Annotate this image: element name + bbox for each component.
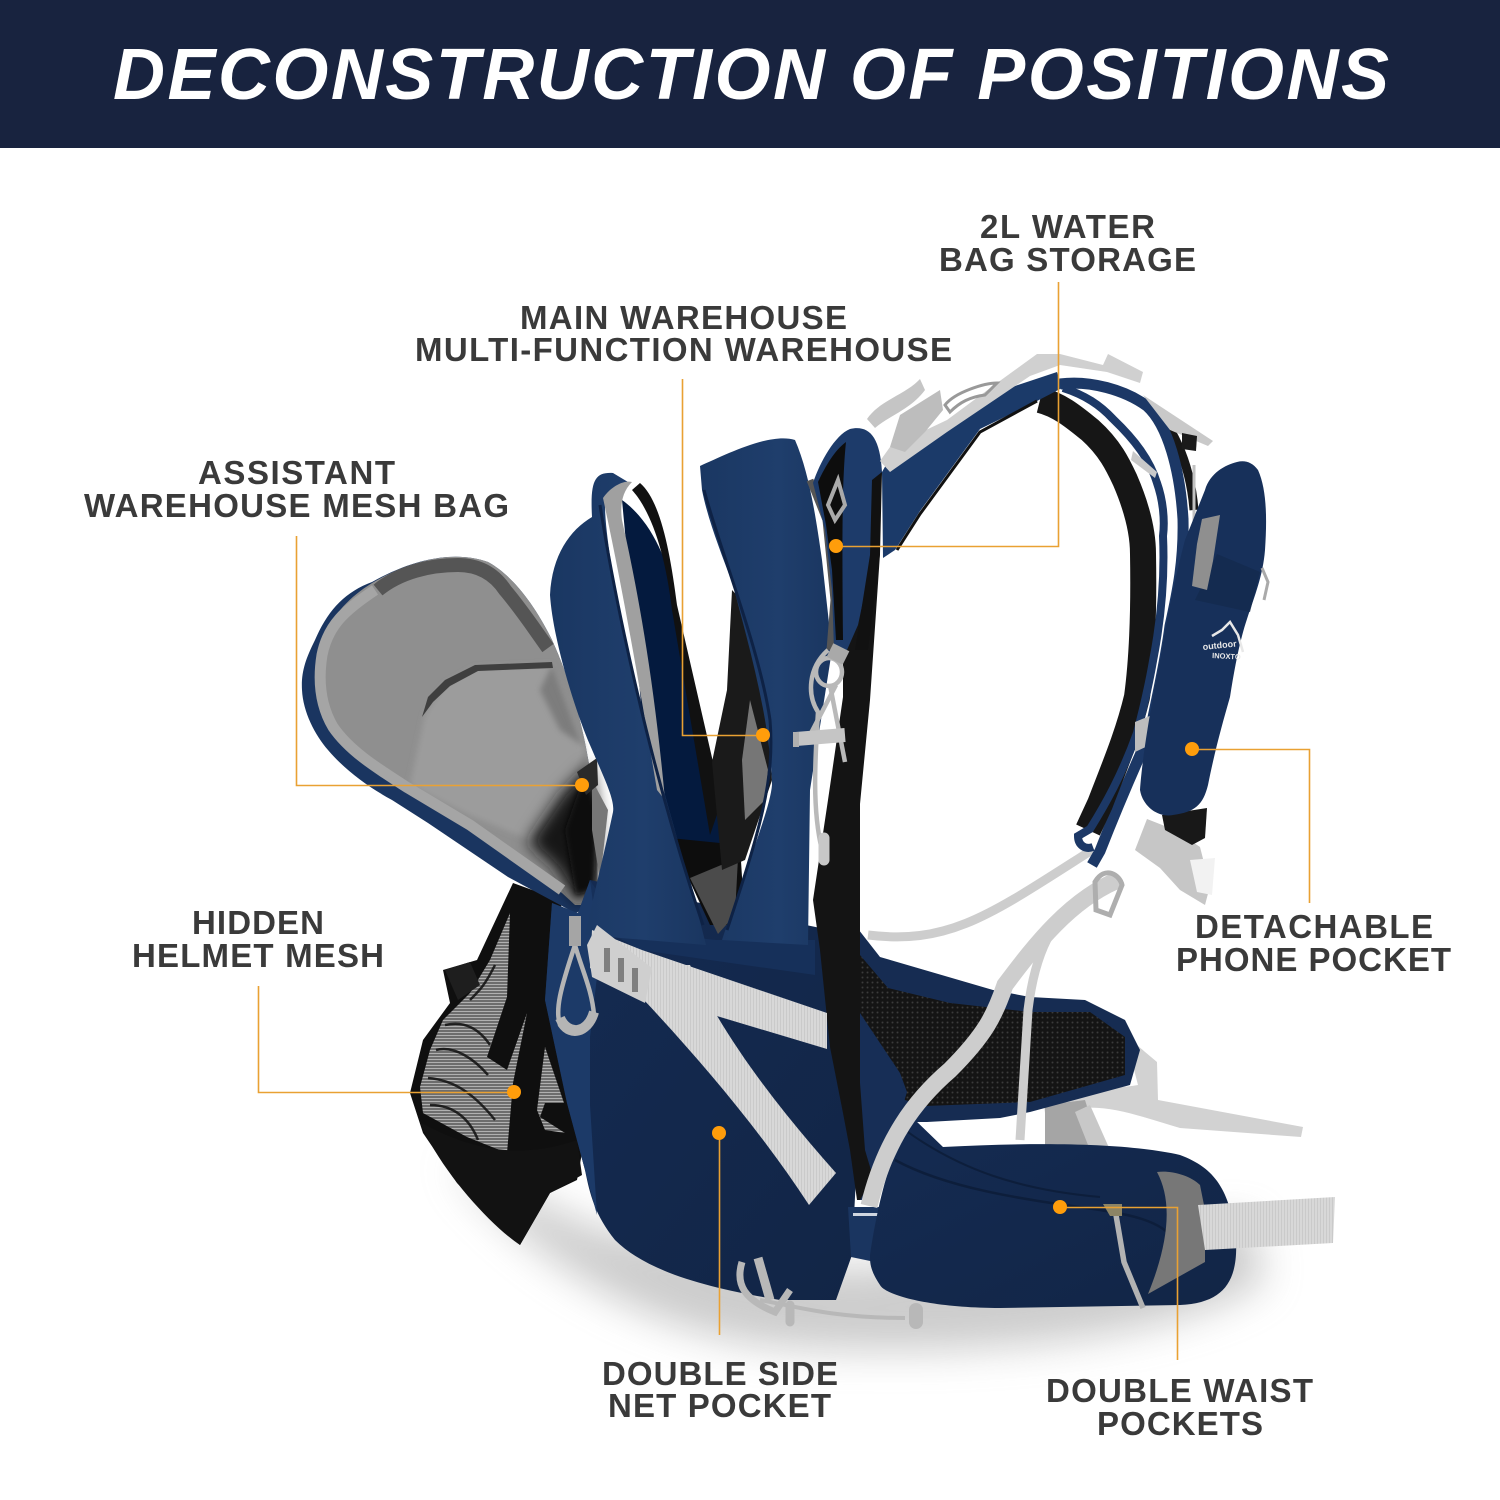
flap folds <box>410 665 585 840</box>
label: double waist pockets: DOUBLE WAIST <box>1046 1372 1313 1409</box>
right hip wing <box>860 1013 907 1200</box>
label: 2L water bag storage: 2L WATER <box>980 208 1155 245</box>
reflective grey patch <box>1148 1172 1205 1294</box>
waist pocket <box>870 1118 1335 1308</box>
bottom compression cord <box>740 1258 916 1322</box>
side webbing strap and buckle <box>558 916 836 1205</box>
label: detachable phone pocket: DETACHABLE <box>1195 908 1433 945</box>
callout: main warehouse <box>682 379 770 742</box>
phone pocket zipper pulls <box>1192 515 1220 590</box>
shoulder harness <box>867 354 1213 865</box>
label: assistant warehouse mesh bag: WAREHOUSE MESH BAG <box>84 487 509 524</box>
callout: double side net pocket <box>712 1126 726 1335</box>
plastic strap buckle <box>587 925 652 1003</box>
callout: detachable phone pocket <box>1185 742 1310 903</box>
black back panel <box>813 472 880 1200</box>
detachable phone pocket <box>1140 461 1268 816</box>
label: 2L water bag storage: BAG STORAGE <box>939 241 1196 278</box>
hidden helmet mesh pocket <box>410 883 582 1245</box>
backpack illustration <box>302 354 1335 1350</box>
lower black pouch <box>420 1122 582 1245</box>
zipper pull loop <box>558 945 594 1034</box>
hip belt rear strap <box>1043 1035 1303 1150</box>
opened flap, grey interior <box>302 557 598 913</box>
phone pocket logo: outdoor <box>1202 638 1238 652</box>
waist zipper pull <box>1116 1215 1143 1308</box>
label: detachable phone pocket <box>1176 908 1451 978</box>
label: double waist pockets: POCKETS <box>1097 1405 1263 1442</box>
phone pocket logo <box>1202 622 1243 662</box>
second shoulder strap <box>1060 383 1183 865</box>
lower side pocket body <box>545 880 860 1300</box>
mesh creases <box>428 965 495 1140</box>
label: 2L water bag storage <box>939 208 1196 278</box>
label: main warehouse: MAIN WAREHOUSE <box>520 299 847 336</box>
outer-side narrow black band <box>1147 404 1194 510</box>
label: assistant warehouse mesh bag <box>84 454 509 524</box>
phone pocket logo: INOXTO <box>1212 651 1241 662</box>
label: hidden helmet mesh: HELMET MESH <box>132 937 384 974</box>
grey binding strip <box>603 482 665 800</box>
title: DECONSTRUCTION OF POSITIONS <box>113 35 1389 115</box>
label: hidden helmet mesh: HIDDEN <box>192 904 324 941</box>
hip label tab <box>848 1207 883 1262</box>
inner shoulder strap <box>1063 388 1164 848</box>
callout: 2L water bag storage <box>829 282 1058 553</box>
belt webbing <box>1198 1197 1335 1250</box>
grey mesh netting <box>420 913 527 1153</box>
callout: hidden helmet mesh <box>258 986 521 1099</box>
side strap adjuster tabs <box>1143 395 1213 446</box>
top webbing strap <box>880 354 1143 472</box>
callout: assistant warehouse mesh bag <box>296 536 589 792</box>
second zipper panel <box>700 438 834 945</box>
mesh hip panel <box>855 925 1140 1122</box>
sternum buckles <box>867 379 925 428</box>
label: detachable phone pocket: PHONE POCKET <box>1176 941 1451 978</box>
compression cord with toggle <box>796 650 846 860</box>
label: assistant warehouse mesh bag: ASSISTANT <box>198 454 395 491</box>
side mesh strip beside flap <box>577 758 608 880</box>
callout: double waist pockets <box>1053 1200 1178 1360</box>
sternum strap tag and buckle <box>1135 808 1215 905</box>
flap binding <box>378 565 548 648</box>
label: main warehouse: MULTI-FUNCTION WAREHOUSE <box>415 331 952 368</box>
front panel with dark interior <box>550 473 745 945</box>
black shoulder padding <box>1040 400 1143 830</box>
title banner <box>0 0 1500 148</box>
label: double side net pocket <box>602 1355 838 1424</box>
label: double side net pocket: NET POCKET <box>608 1387 831 1424</box>
slim webbing straps <box>868 850 1122 1206</box>
label: double waist pockets <box>1046 1372 1313 1442</box>
label: hidden helmet mesh <box>132 904 384 974</box>
fleece lining <box>690 858 738 934</box>
shoulder pad <box>882 372 1062 558</box>
water bag compartment opening <box>813 428 882 650</box>
floor shadow <box>450 1160 1265 1350</box>
label: double side net pocket: DOUBLE SIDE <box>602 1355 838 1392</box>
label: main warehouse <box>415 299 952 368</box>
